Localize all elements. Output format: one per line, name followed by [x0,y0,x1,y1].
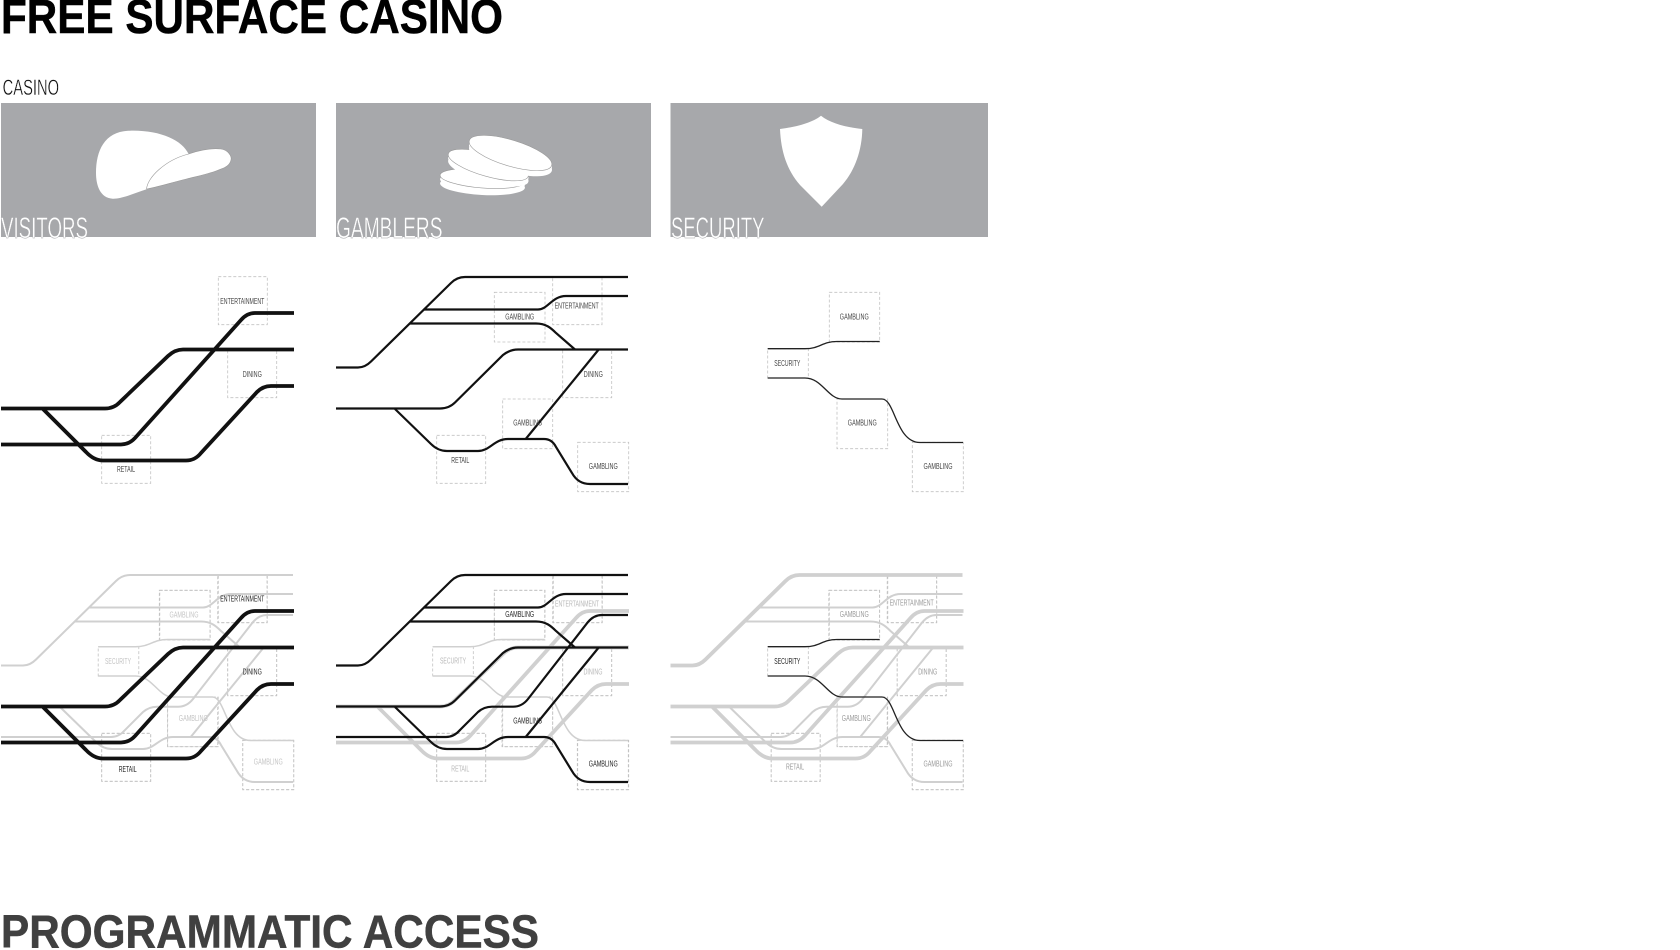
panel: visitors [1,103,316,245]
overlay diagram: visitors highlighted: SECURITY [105,656,131,666]
diagram: security circulation: GAMBLING [924,461,952,471]
overlay diagram: security highlighted: DINING [918,667,937,677]
overlay diagram: gamblers highlighted: GAMBLING [513,715,542,725]
overlay diagram: security highlighted: GAMBLING [840,609,869,619]
panel: gamblers [336,103,651,245]
diagram: gamblers circulation: GAMBLING [589,461,618,471]
overlay diagram: gamblers highlighted: GAMBLING [505,609,534,619]
overlay diagram: gamblers highlighted: SECURITY [440,655,466,665]
overlay diagram: visitors highlighted: GAMBLING [179,713,208,723]
overlay diagram: visitors highlighted: RETAIL [119,764,137,774]
diagram: visitors circulation: RETAIL [117,464,135,474]
diagram: visitors circulation [1,277,294,483]
diagram: security circulation: SECURITY [774,358,800,368]
overlay diagram: gamblers highlighted: RETAIL [451,764,469,774]
icon: shield [780,116,862,207]
diagram: security circulation: GAMBLING [840,311,869,321]
diagram: visitors circulation: DINING [243,369,262,379]
diagram: visitors circulation: ENTERTAINMENT [220,296,264,306]
label: visitors: VISITORS [1,212,88,245]
diagram: gamblers circulation [336,277,629,492]
diagram: gamblers circulation: GAMBLING [513,418,542,428]
diagram: security circulation: GAMBLING [848,418,877,428]
overlay diagram: security highlighted: GAMBLING [924,759,952,769]
section label: casino: CASINO [3,75,59,100]
overlay diagram: security highlighted: SECURITY [774,656,800,666]
icon: cap [96,131,231,199]
overlay diagram: security highlighted: ENTERTAINMENT [890,597,934,607]
panel: security [670,103,988,245]
overlay diagram: visitors highlighted: GAMBLING [170,609,198,619]
overlay diagram: security highlighted: RETAIL [786,761,804,771]
diagram: gamblers circulation: ENTERTAINMENT [555,300,599,310]
diagram: gamblers circulation: RETAIL [451,455,469,465]
overlay diagram: gamblers highlighted: GAMBLING [589,759,618,769]
overlay diagram: visitors highlighted: DINING [243,667,262,677]
overlay diagram: security highlighted [670,575,964,790]
diagram: gamblers circulation: DINING [584,369,603,379]
label: security: SECURITY [671,212,764,245]
diagram: security circulation [768,292,963,492]
overlay diagram: visitors highlighted: ENTERTAINMENT [220,594,264,604]
label: gamblers: GAMBLERS [336,212,442,245]
overlay diagram: visitors highlighted [1,575,294,790]
overlay diagram: gamblers highlighted: DINING [584,667,602,677]
overlay diagram: gamblers highlighted: ENTERTAINMENT [555,599,599,609]
overlay diagram: security highlighted: GAMBLING [842,713,871,723]
icon: stacked chips [439,128,555,197]
overlay diagram: gamblers highlighted [336,575,629,790]
overlay diagram: visitors highlighted: GAMBLING [254,757,283,767]
diagram: gamblers circulation: GAMBLING [505,311,534,321]
